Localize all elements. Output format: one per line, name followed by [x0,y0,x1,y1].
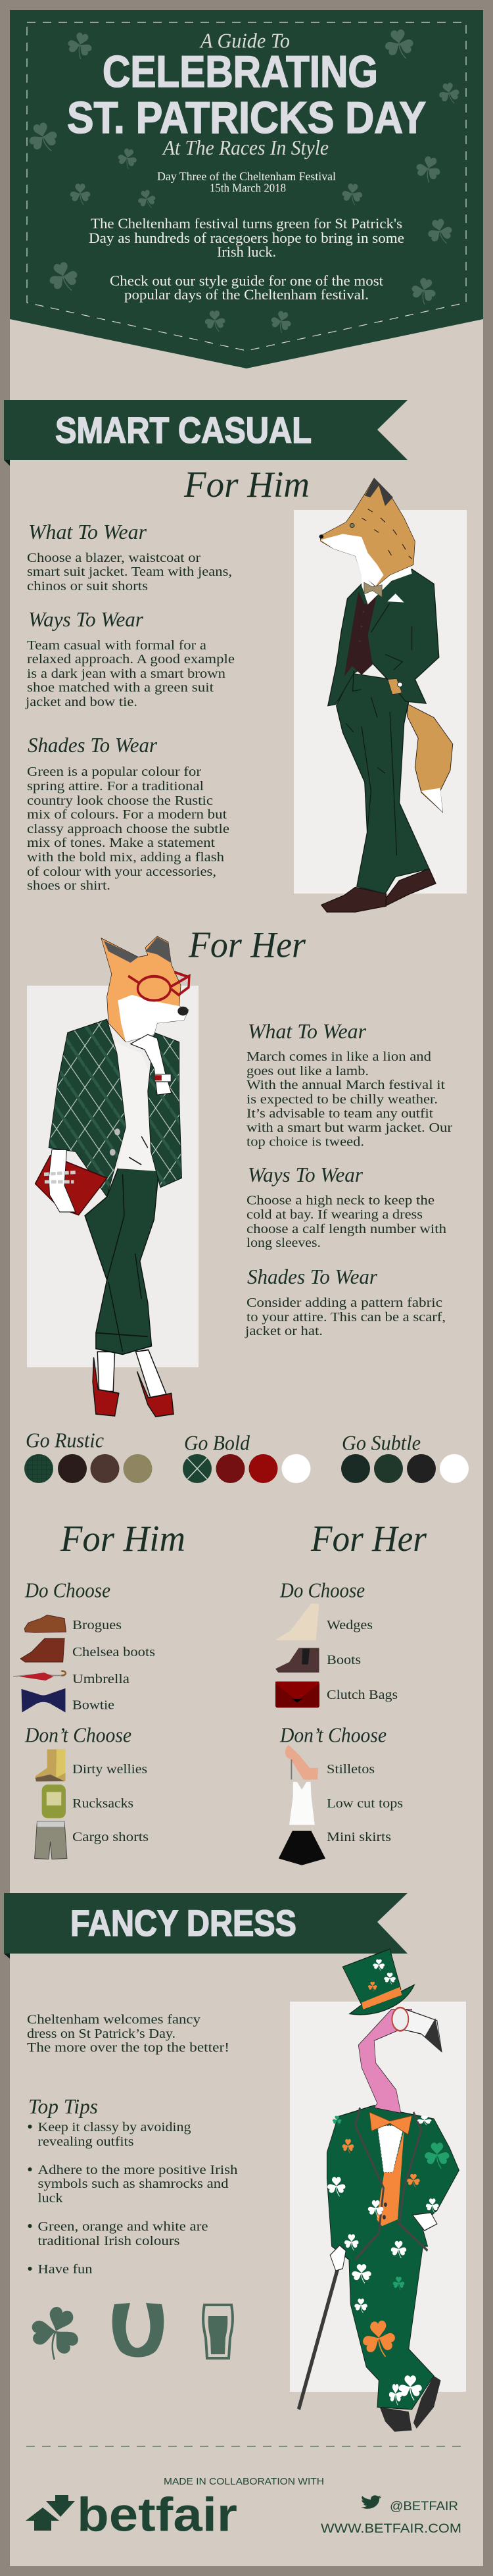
holding hand [49,1149,76,1212]
hand and watch [130,1034,172,1095]
list: him don't choose: Dirty wellies [72,1762,147,1777]
list: him do choose: Umbrella [72,1672,129,1686]
ways to wear: Team casual with formal for a [27,638,206,653]
icon: twitter bird [361,2495,381,2509]
legs [97,1351,115,1392]
ribbon: fancy dress [4,1893,408,1959]
what to wear: It’s advisable to team any outfit [246,1107,433,1121]
panel: her advice [245,1019,452,1338]
clutch bag [35,1155,107,1215]
shirt collar and pocket square [362,567,412,605]
list: her don't choose: Mini skirts [327,1830,391,1844]
icon: brogue [24,1615,66,1632]
icon: shamrock [22,2300,89,2366]
footer: social [321,2495,461,2536]
shades to wear: Green is a popular colour for [27,765,201,779]
icon: wellies [35,1750,65,1782]
what to wear: What To Wear [248,1019,367,1043]
suit shamrocks [327,1959,439,2405]
divider [26,2446,466,2447]
intro text: fancy dress: The more over the top the better! [27,2040,229,2055]
red shoes [93,1357,119,1416]
icon: clutch bag [275,1682,319,1707]
date: Day Three of the Cheltenham Festival [157,170,336,183]
icon: cargo shorts [35,1821,67,1859]
title: A Guide To [199,29,290,53]
white top [115,1042,157,1171]
suit [327,2106,459,2410]
list: him do choose: Brogues [72,1618,122,1632]
shades to wear: Shades To Wear [247,1265,378,1288]
icon: umbrella [13,1671,66,1680]
footer: social: WWW.BETFAIR.COM [321,2522,461,2536]
intro text [89,215,404,303]
intro text: The Cheltenham festival turns green for St Patrick's [91,215,402,232]
list: her don't choose: Low cut tops [327,1796,403,1811]
tweed jacket [49,1019,126,1197]
icon: rucksack [42,1784,66,1818]
shirt frills and waistcoat [377,2125,404,2173]
footer: collaboration label: MADE IN COLLABORATION WITH [164,2476,324,2487]
intro text: fancy dress [27,2012,229,2055]
what to wear: What To Wear [28,520,147,543]
shades to wear [27,733,229,893]
ways to wear: choose a calf length number with [246,1222,446,1236]
palette: go subtle: Go Subtle [342,1430,421,1454]
shamrock decorations [24,28,461,335]
top tips: traditional Irish colours [38,2234,180,2248]
list: her don't choose: Stilletos [327,1762,375,1777]
list: him don't choose: Cargo shorts [72,1830,149,1844]
ways to wear: Ways To Wear [248,1163,364,1186]
icon: pint glass [203,2305,233,2358]
top tips: Keep it classy by avoiding [38,2120,191,2134]
shades to wear: classy approach choose the subtle [27,822,229,836]
title: ST. PATRICKS DAY [67,93,426,143]
buttons and folds [110,1128,120,1155]
list: her don't choose: Don’t Choose [279,1723,387,1746]
title: CELEBRATING [103,47,378,97]
palette: go rustic [24,1428,153,1483]
top tips: Adhere to the more positive Irish [38,2163,238,2177]
icons: luck symbols [22,2300,233,2366]
intro text: popular days of the Cheltenham festival. [124,286,369,303]
ways to wear: is a dark jean with a smart brown [27,667,225,681]
shades to wear: with the bold mix, adding a flash [27,850,224,865]
icon: chelsea boot [20,1638,64,1662]
tail [407,704,453,812]
icon: boots [275,1648,319,1673]
shades to wear: mix of colours. For a modern but [27,807,227,822]
shades to wear: Shades To Wear [28,733,158,757]
intro text: Irish luck. [217,243,276,260]
shades to wear: country look choose the Rustic [27,794,213,808]
what to wear: Choose a blazer, waistcoat or [27,551,200,565]
what to wear: top choice is tweed. [246,1134,364,1149]
palette: go bold: Go Bold [184,1430,250,1454]
icon: bowtie [22,1688,65,1713]
footer: social: @BETFAIR [390,2500,458,2513]
ribbon: fancy dress: FANCY DRESS [70,1902,296,1944]
ways to wear: relaxed approach. A good example [27,652,235,667]
heading: for him: For Him [183,465,310,505]
ribbon: smart casual [4,400,408,466]
ways to wear [246,1163,446,1250]
list: her do choose: Clutch Bags [327,1688,398,1702]
heading: for her list: For Her [310,1519,427,1559]
trousers [337,674,429,894]
shades to wear: to your attire. This can be a scarf, [246,1310,446,1325]
ways to wear: cold at bay. If wearing a dress [246,1207,423,1222]
palette: go bold [183,1430,310,1483]
logo: betfair [26,2488,237,2541]
illustration: fox in tweed jacket [27,936,199,1417]
illustration: fox in green suit [294,478,467,912]
list: him do choose: Chelsea boots [72,1645,155,1659]
illustration: flamingo in shamrock suit [290,1949,466,2432]
waistcoat [344,592,377,676]
top tips: symbols such as shamrocks and [38,2177,229,2191]
shades to wear: mix of tones. Make a statement [27,836,216,850]
jacket [328,569,439,706]
icon: low cut top [289,1782,315,1825]
ways to wear: Choose a high neck to keep the [246,1194,434,1208]
what to wear: smart suit jacket. Team with jeans, [27,565,232,579]
shoes [380,2407,412,2432]
top tips: Have fun [38,2262,92,2277]
ways to wear: long sleeves. [246,1236,321,1250]
icon: mini skirt [279,1831,325,1865]
waistcoat buttons [383,2202,387,2219]
list: him do choose: Bowtie [72,1698,114,1712]
shoes [321,888,386,912]
shades to wear: Consider adding a pattern fabric [246,1296,442,1310]
bow tie [364,582,382,597]
what to wear: is expected to be chilly weather. [246,1092,438,1107]
hand and watch [388,679,402,695]
what to wear: goes out like a lamb. [246,1064,369,1078]
list: her do choose: Boots [327,1653,361,1667]
what to wear [246,1019,452,1149]
top tips: revealing outfits [38,2134,134,2149]
what to wear: March comes in like a lion and [246,1049,431,1064]
fold lines [346,603,412,855]
date [157,170,336,195]
what to wear: with a smart but warm jacket. Our [246,1121,452,1135]
list: him do choose [13,1578,155,1713]
list: her don't choose [279,1723,403,1865]
bow tie [369,2112,412,2134]
shades to wear: spring attire. For a traditional [27,779,204,794]
intro text: Day as hundreds of racegoers hope to bring in some [89,230,404,246]
list: her do choose [275,1578,398,1707]
trousers [85,1169,159,1354]
shades to wear: shoes or shirt. [27,878,110,893]
neck and head [358,2009,412,2113]
ribbon: smart casual: SMART CASUAL [55,409,312,451]
shades to wear [245,1265,446,1338]
panel: him advice [25,520,235,893]
icon: betfair arrows [26,2495,75,2531]
top tips: Top Tips [28,2094,98,2118]
ways to wear: Ways To Wear [28,607,144,631]
hands [330,2245,346,2271]
intro text: fancy dress: dress on St Patrick’s Day. [27,2027,176,2041]
what to wear: With the annual March festival it [246,1078,445,1092]
heading: for her: For Her [188,925,306,966]
icon: stiletto [285,1745,318,1780]
icon: wedge [276,1604,319,1640]
head [101,936,189,1042]
intro text: fancy dress: Cheltenham welcomes fancy [27,2012,200,2027]
list: her do choose: Do Choose [279,1578,365,1602]
ways to wear [25,607,235,709]
ways to wear: shoe matched with a green suit [27,680,214,695]
list: him don't choose: Don’t Choose [24,1723,131,1746]
lapels [355,2108,427,2260]
head [320,478,415,587]
red glasses [128,972,189,1001]
shades to wear: of colour with your accessories, [27,865,216,879]
top tips: Green, orange and white are [38,2219,208,2234]
list: him don't choose [24,1723,149,1859]
logo: betfair: betfair [77,2488,237,2541]
date: 15th March 2018 [210,182,286,195]
ways to wear: jacket and bow tie. [25,695,137,709]
cane [298,2260,340,2410]
palette: go subtle [341,1430,469,1483]
monocle [392,2008,408,2031]
what to wear: chinos or suit shorts [27,579,148,593]
title [67,29,426,159]
palette: go rustic: Go Rustic [26,1428,104,1452]
list: her do choose: Wedges [327,1618,373,1632]
what to wear [27,520,232,593]
top tips [28,2094,238,2277]
list: him do choose: Do Choose [24,1578,110,1602]
icon: horseshoe [112,2303,164,2357]
header banner [10,10,483,368]
heading: for him list: For Him [60,1519,185,1559]
top tips: luck [38,2191,63,2206]
intro text: Check out our style guide for one of the most [110,272,383,289]
top hat [342,1949,401,2005]
shades to wear: jacket or hat. [245,1324,323,1338]
title: At The Races In Style [162,136,329,159]
list: him don't choose: Rucksacks [72,1796,133,1811]
